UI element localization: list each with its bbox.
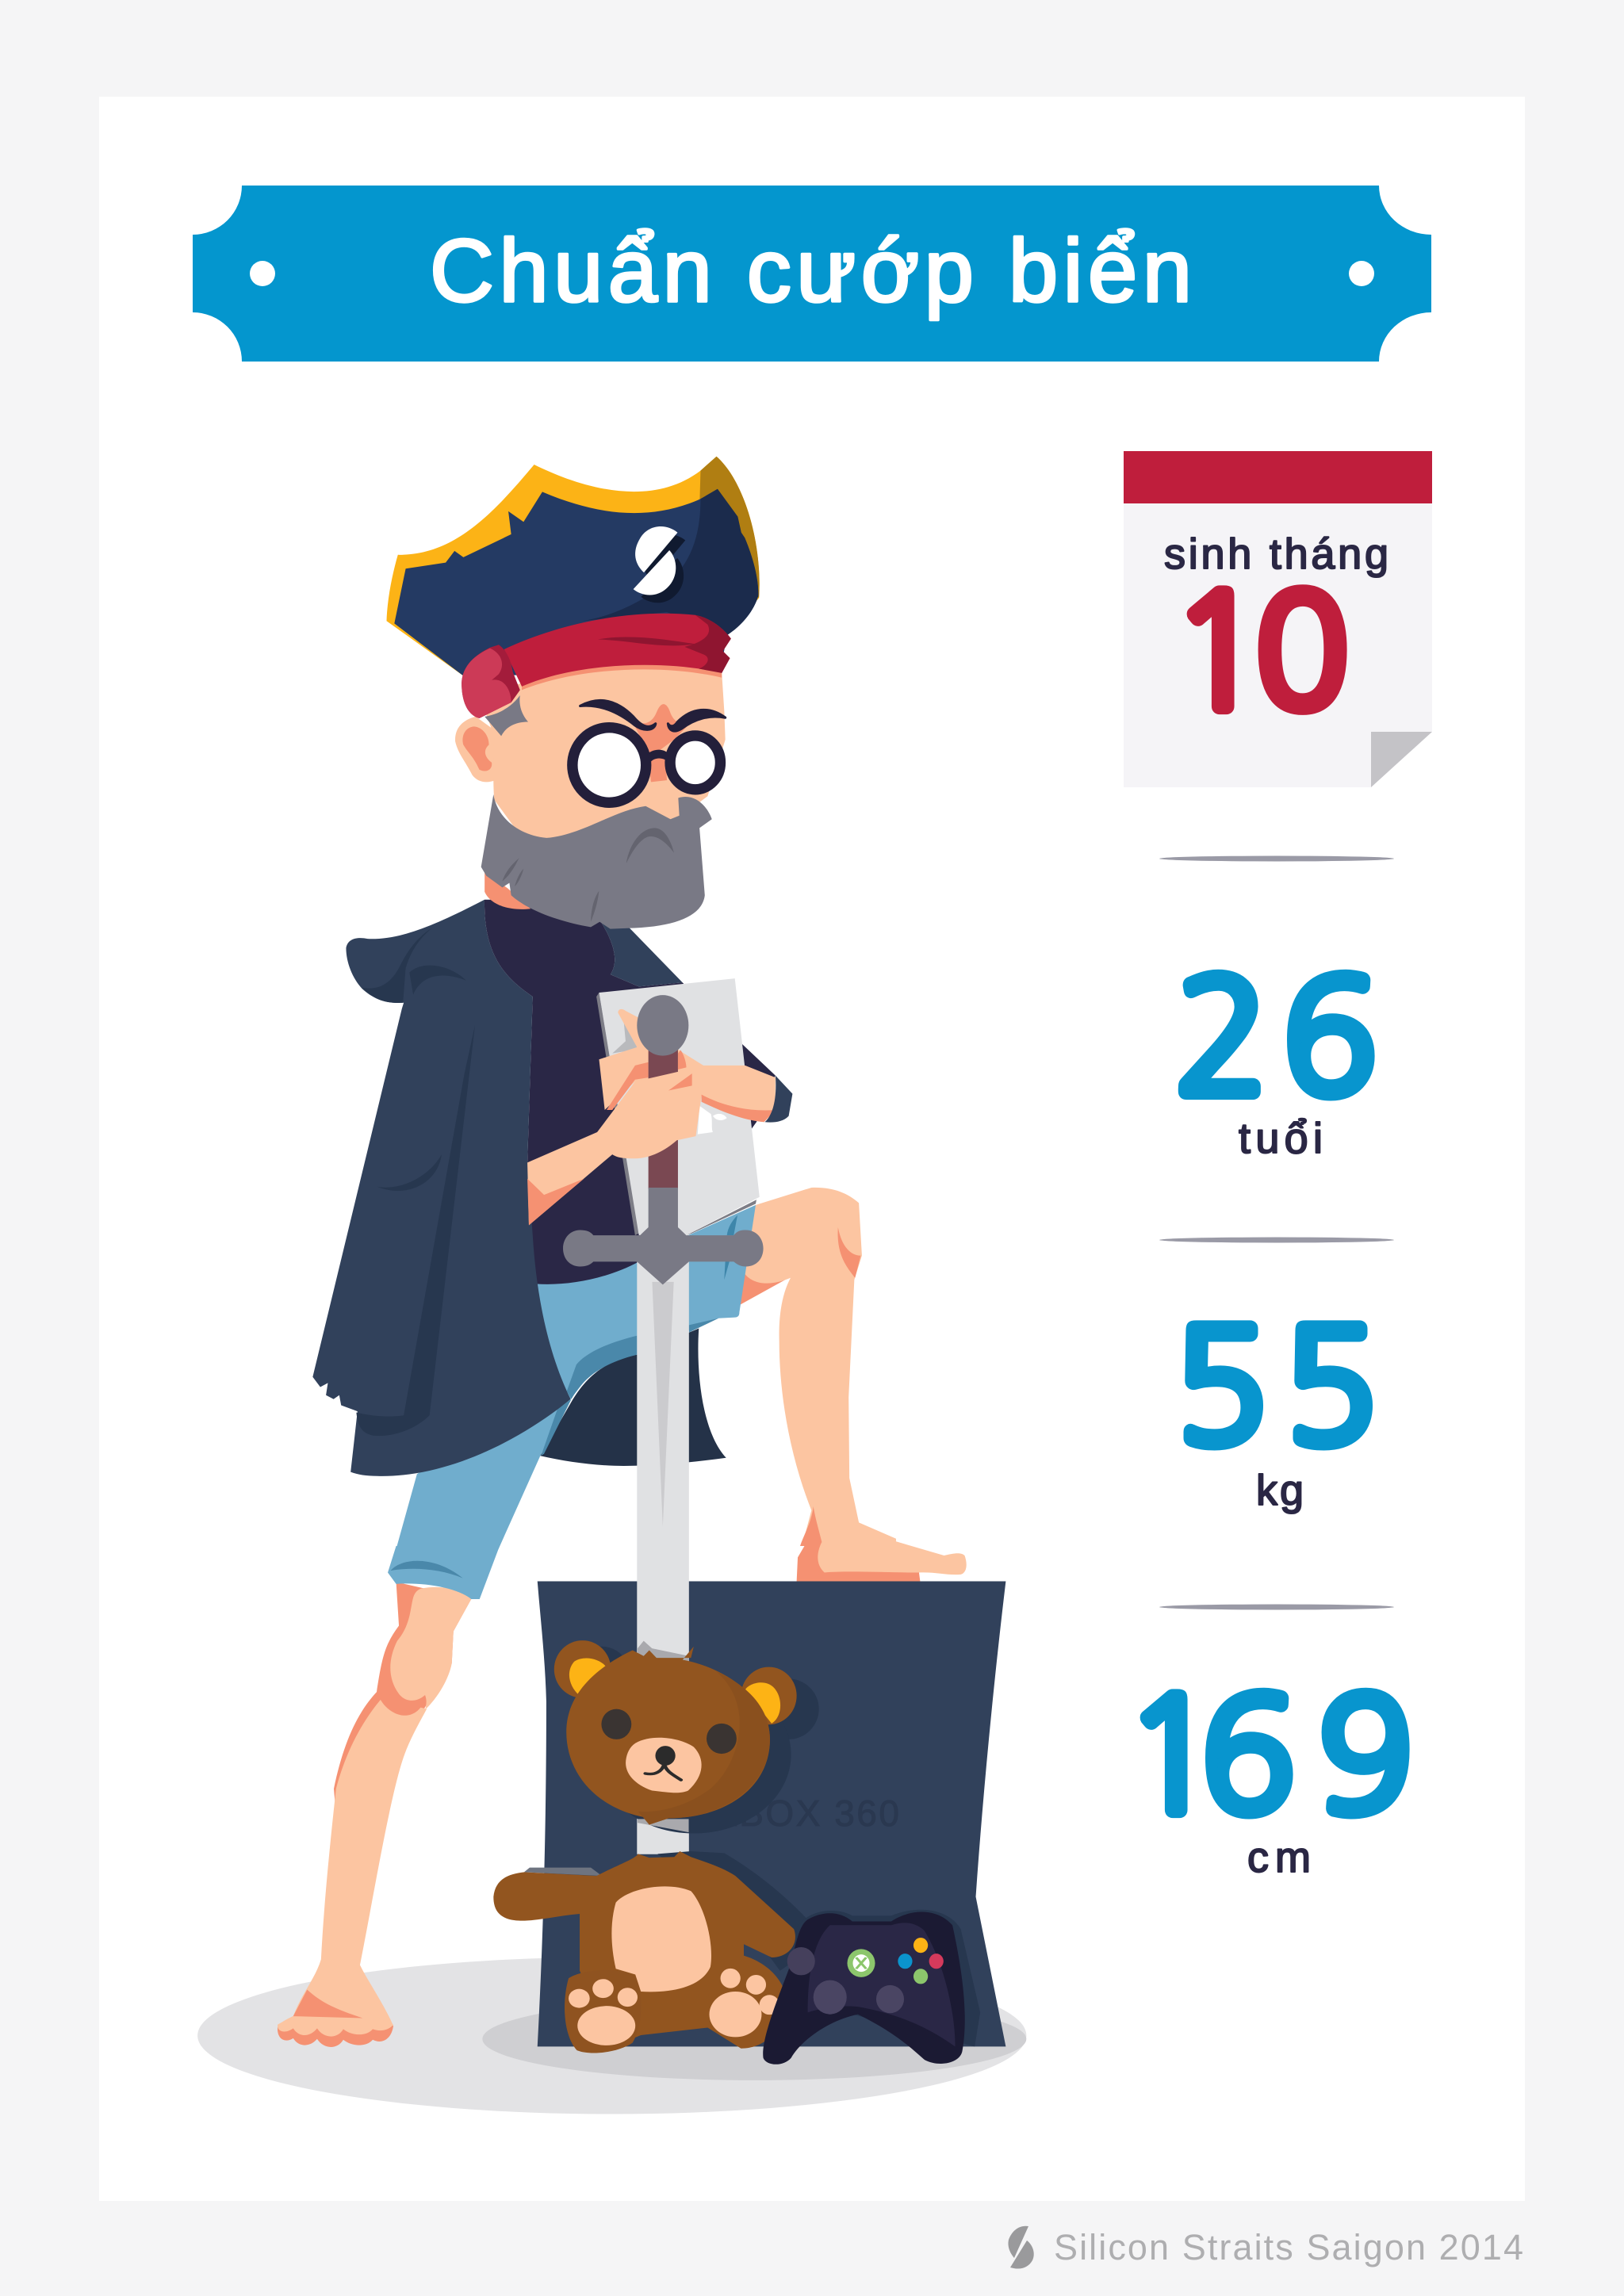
ear (455, 717, 508, 782)
pirate hat (386, 457, 760, 675)
bandana (462, 614, 731, 718)
shorts hem (388, 1546, 500, 1599)
neck (485, 872, 530, 909)
character: head (386, 457, 760, 929)
dpad (787, 1947, 815, 1975)
calendar number: 10 (1170, 574, 1350, 731)
pommel (637, 995, 688, 1056)
title banner (193, 186, 1431, 362)
side hair (485, 695, 528, 736)
character: back hand, tablet and arms (596, 978, 792, 1235)
footer logo (1008, 2226, 1034, 2269)
guard (563, 1188, 764, 1284)
brow furrow (631, 704, 688, 782)
character: front hand gripping sword (527, 1069, 702, 1225)
xbox console box (538, 1581, 1005, 2046)
stat: height: 169 (1124, 1678, 1413, 1835)
tablet (596, 978, 760, 1235)
character: cloak (312, 900, 571, 1476)
beard (481, 794, 712, 929)
age unit: tuổi (1239, 1115, 1323, 1162)
weight unit: kg (1256, 1467, 1304, 1514)
bear ears (554, 1640, 611, 1698)
height unit: cm (1247, 1834, 1311, 1881)
calendar: birth month (1124, 451, 1432, 787)
bear shadows (524, 1641, 819, 1971)
calendar label: sinh tháng (1164, 530, 1388, 578)
bear snout (626, 1738, 702, 1793)
character: back of cloak (540, 1329, 726, 1466)
footer credit (1008, 2226, 1523, 2269)
left paw (565, 1970, 642, 2053)
footer text: Silicon Straits Saigon 2014 (1054, 2227, 1523, 2267)
xbox button (847, 1949, 875, 1977)
right paw (709, 1969, 779, 2037)
face (486, 665, 726, 846)
bear head (566, 1647, 770, 1825)
teddy bear (493, 1640, 819, 2053)
character: raised leg (737, 1188, 896, 1546)
character: standing leg (278, 1582, 471, 2047)
title: Chuẩn cướp biển (430, 221, 1192, 320)
bear belly (611, 1886, 711, 1992)
right lapel (601, 922, 683, 986)
stat: weight: 55 (1174, 1309, 1378, 1466)
cuff (764, 1076, 792, 1123)
tablet logo (698, 1106, 727, 1135)
back hand (599, 1009, 776, 1122)
hat logo (634, 526, 685, 603)
game controller (763, 1910, 980, 2064)
character: shirt (485, 900, 776, 1284)
blade (637, 1260, 689, 1854)
grip (649, 1049, 678, 1188)
face buttons (914, 1938, 928, 1953)
character: foot on console (797, 1538, 967, 1581)
character: shorts (396, 1205, 756, 1549)
eyebrows (580, 700, 726, 731)
bear body (493, 1851, 795, 2053)
cloak folds (362, 928, 432, 1003)
character: sword (563, 995, 764, 1854)
xbox label: XBOX 360 (713, 1793, 899, 1834)
ground shadows (197, 1957, 1026, 2114)
stat: age: 26 (1174, 959, 1377, 1116)
glasses (573, 728, 720, 802)
bear eyes (601, 1709, 631, 1739)
thumbsticks (814, 1980, 847, 2015)
